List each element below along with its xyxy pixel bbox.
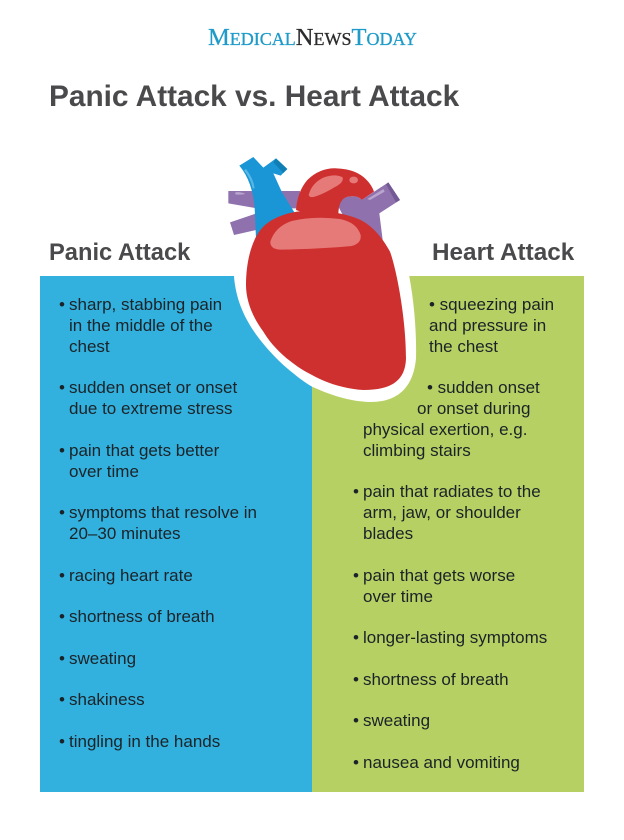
bullets: heart attack list: • — [353, 482, 359, 501]
symptom: sharp, stabbing pain — [69, 295, 222, 314]
symptom: blades — [363, 524, 413, 543]
symptom: pain that gets worse — [363, 566, 515, 585]
symptom: longer-lasting symptoms — [363, 628, 547, 647]
symptom: and pressure in — [429, 316, 546, 335]
panel: panic attack background — [40, 276, 312, 792]
symptom — [69, 295, 222, 356]
symptom: • sudden onset — [427, 378, 540, 397]
symptom: climbing stairs — [363, 441, 471, 460]
symptom: over time — [69, 462, 139, 481]
symptom: shortness of breath — [363, 670, 509, 689]
symptom: racing heart rate — [69, 566, 193, 585]
symptom: shortness of breath — [69, 607, 215, 626]
bullets: heart attack list — [353, 482, 359, 772]
text block: panic attack symptoms — [69, 295, 257, 751]
bullets: panic attack list: • — [59, 295, 65, 314]
symptom — [363, 378, 540, 460]
bullets: panic attack list: • — [59, 378, 65, 397]
symptom: chest — [69, 337, 110, 356]
symptom — [69, 503, 257, 543]
bullets: heart attack list: • — [353, 753, 359, 772]
heading: Heart Attack: Heart Attack — [432, 239, 574, 266]
symptom: symptoms that resolve in — [69, 503, 257, 522]
symptom: 20–30 minutes — [69, 524, 181, 543]
symptom: pain that radiates to the — [363, 482, 541, 501]
bullets: panic attack list: • — [59, 503, 65, 522]
bullets: panic attack list: • — [59, 690, 65, 709]
symptom: • squeezing pain — [429, 295, 554, 314]
bullets: panic attack list: • — [59, 732, 65, 751]
bullets: heart attack list: • — [353, 711, 359, 730]
logo: Medical News Today: MEDICALNEWSTODAY — [208, 24, 417, 51]
bullets: panic attack list: • — [59, 566, 65, 585]
symptom: nausea and vomiting — [363, 753, 520, 772]
symptom — [69, 441, 219, 481]
symptom: arm, jaw, or shoulder — [363, 503, 521, 522]
symptom: the chest — [429, 337, 498, 356]
panel: heart attack background — [312, 276, 584, 792]
title: Panic Attack vs. Heart Attack — [49, 80, 459, 113]
symptom: due to extreme stress — [69, 399, 232, 418]
symptom — [429, 295, 554, 356]
symptom: over time — [363, 587, 433, 606]
symptom: sweating — [363, 711, 430, 730]
symptom: sweating — [69, 649, 136, 668]
text block: heart attack symptoms — [363, 295, 554, 772]
bullets: heart attack list: • — [353, 566, 359, 585]
symptom: sudden onset or onset — [69, 378, 237, 397]
symptom — [363, 566, 515, 606]
heading: Panic Attack: Panic Attack — [49, 240, 190, 266]
symptom — [69, 378, 238, 418]
bullets: panic attack list: • — [59, 607, 65, 626]
symptom: or onset during — [417, 399, 530, 418]
symptom: shakiness — [69, 690, 145, 709]
bullets: panic attack list — [59, 295, 65, 751]
bullets: panic attack list: • — [59, 649, 65, 668]
bullets: panic attack list: • — [59, 441, 65, 460]
bullets: heart attack list: • — [353, 628, 359, 647]
symptom: tingling in the hands — [69, 732, 220, 751]
symptom — [363, 482, 541, 543]
symptom: pain that gets better — [69, 441, 219, 460]
icon: heart illustration — [228, 157, 416, 402]
bullets: heart attack list: • — [353, 670, 359, 689]
symptom: in the middle of the — [69, 316, 213, 335]
symptom: physical exertion, e.g. — [363, 420, 527, 439]
